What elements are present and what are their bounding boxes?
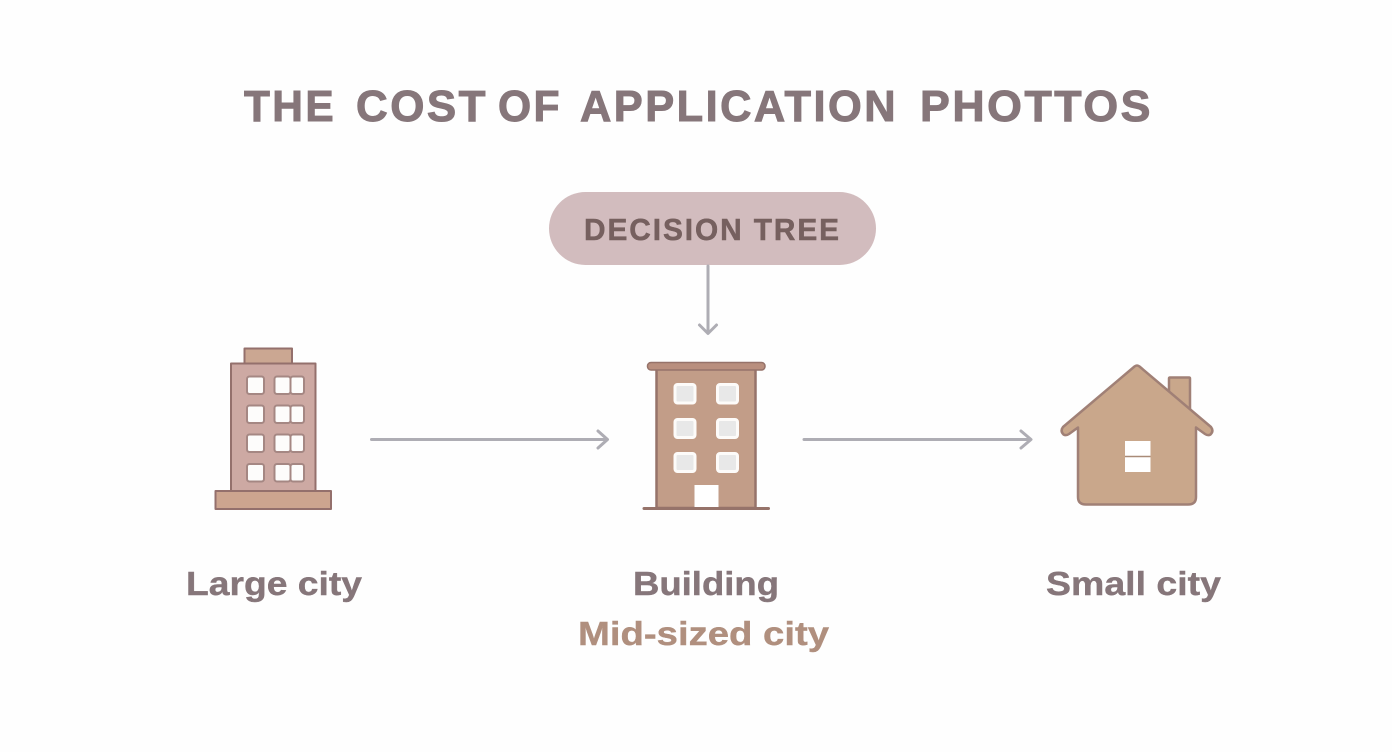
label: building: Building — [633, 565, 779, 602]
icon: small city house — [1062, 366, 1212, 504]
arrow: pill to building — [700, 266, 716, 334]
icon: mid-sized building — [644, 362, 768, 508]
title: COST — [356, 82, 488, 131]
title: THE — [244, 82, 336, 131]
icon: large city tower — [216, 348, 331, 509]
arrow: building to small city — [804, 431, 1031, 448]
title: PHOTTOS — [920, 82, 1153, 131]
arrow: large city to building — [372, 431, 608, 448]
title — [244, 82, 1153, 131]
title: APPLICATION — [580, 82, 898, 131]
label: mid-sized city: Mid-sized city — [578, 615, 830, 652]
label: large city: Large city — [186, 565, 363, 602]
decision tree pill — [549, 192, 876, 265]
label: small city: Small city — [1046, 565, 1222, 602]
title: OF — [498, 82, 562, 131]
decision tree pill: DECISION TREE — [584, 212, 841, 247]
